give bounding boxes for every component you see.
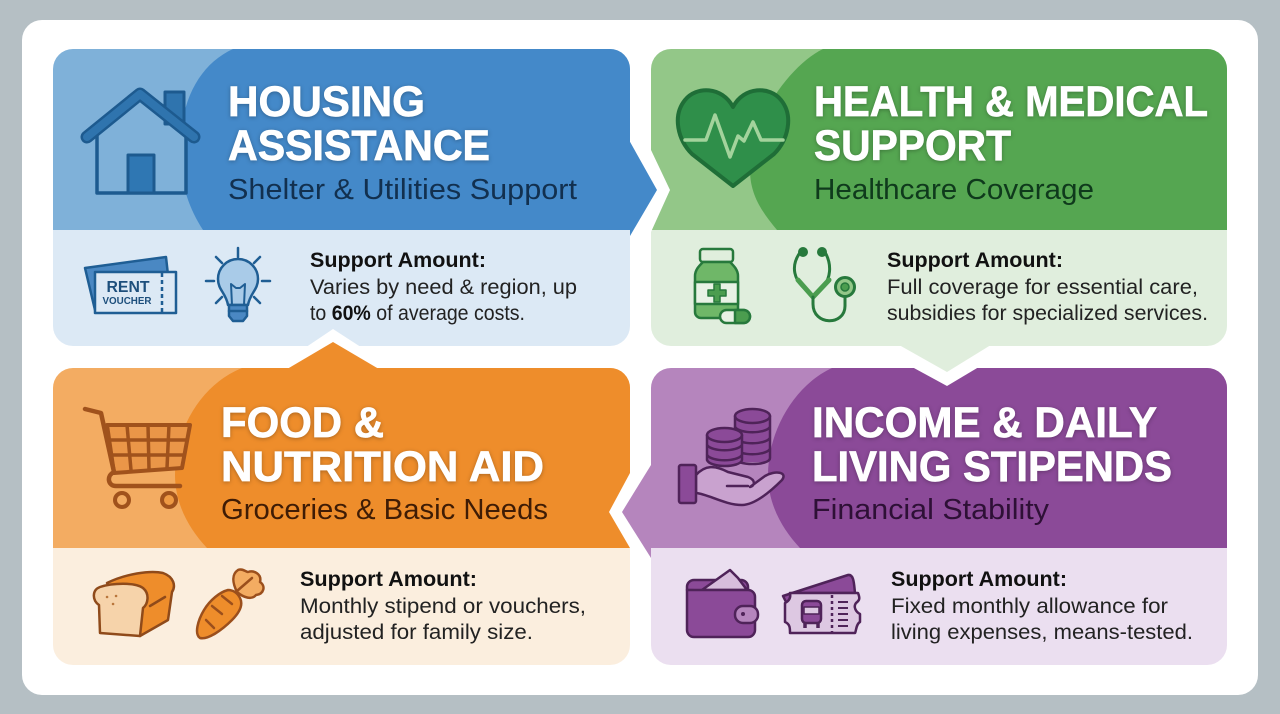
heading: income and daily living stipends: LIVING STIPENDS [812,443,1172,491]
support amount text: adjusted for family size. [300,620,533,644]
housing panel background [53,49,630,346]
icon: light bulb [206,248,270,321]
heading: health and medical support: SUPPORT [814,122,1011,170]
support amount text: living expenses, means-tested. [891,620,1193,644]
icon: rent voucher: VOUCHER [102,295,152,307]
support amount text [300,568,586,644]
health panel background [651,49,1227,346]
support amount text: Fixed monthly allowance for [891,594,1168,618]
icon: wallet [687,570,758,637]
support amount text [891,568,1193,644]
subheading: shelter and utilities: Shelter & Utilities Support [228,174,577,206]
income panel background [651,368,1227,665]
support amount text [887,249,1208,325]
subheading: financial stability: Financial Stability [812,494,1050,526]
arrow: income to food [609,465,651,558]
panel: housing assistance [53,49,630,346]
support amount text: to 60% of average costs. [310,301,525,325]
arrow: food to housing [288,329,378,368]
panel: food and nutrition aid [53,368,630,665]
icon: rent voucher [85,257,176,313]
support amount text: Monthly stipend or vouchers, [300,594,586,618]
heading: health and medical support [814,78,1208,170]
heading: housing assistance: ASSISTANCE [228,122,490,170]
icon: stethoscope [794,248,854,321]
heading: income and daily living stipends [812,399,1172,491]
arrow: housing to health [629,140,670,236]
icon: carrot [197,569,263,638]
support amount text [310,249,577,325]
icon: medicine bottle [695,249,750,323]
arrow: health to income [900,346,990,386]
heading: housing assistance: HOUSING [228,78,425,126]
support amount text: Varies by need & region, up [310,275,577,299]
food panel background [53,368,630,665]
heading: health and medical support: HEALTH & MEDICAL [814,78,1208,126]
heading: food and nutrition aid [221,399,544,491]
icon: bus ticket [783,575,860,633]
support amount text: Support Amount: [310,249,486,272]
support amount text: Support Amount: [887,249,1063,272]
subheading: healthcare coverage: Healthcare Coverage [814,174,1094,206]
heading: income and daily living stipends: INCOME & DAILY [812,399,1157,447]
heading: food and nutrition aid: NUTRITION AID [221,443,544,491]
heading: food and nutrition aid: FOOD & [221,399,384,447]
subheading: groceries and basic needs: Groceries & Basic Needs [221,494,548,526]
support amount text: Support Amount: [891,568,1067,591]
icon: bread loaf [94,572,174,636]
icon: shopping cart [85,409,190,507]
icon: rent voucher: RENT [106,279,150,296]
panel: income and daily living stipends [651,368,1227,665]
support amount text: Full coverage for essential care, [887,275,1198,299]
support amount text: Support Amount: [300,568,477,591]
icon: coins over hand [679,409,784,505]
heading: housing assistance [228,78,490,170]
support amount text: subsidies for specialized services. [887,301,1208,325]
panel: health and medical support [651,49,1227,346]
icon: house [87,92,194,193]
icon: heart with pulse [678,90,788,186]
